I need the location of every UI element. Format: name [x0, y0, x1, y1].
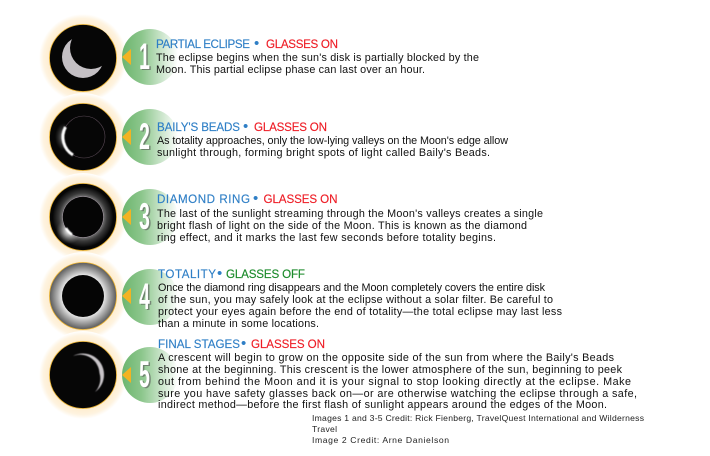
heading: partial eclipse: • [254, 35, 259, 52]
text: diamond ring description: ring effect, and it marks the last few seconds before totality begins. [157, 232, 496, 244]
text: totality description: protect your eyes again before the end of totality—the total eclipse may last less [158, 306, 563, 318]
heading: baily's beads: GLASSES ON [254, 121, 327, 134]
panel: step 3 diamond ring [39, 173, 543, 261]
icon: number badge 2: 2 [139, 116, 150, 158]
icon: totality photo [39, 252, 127, 340]
icon: final crescent photo [39, 331, 127, 419]
heading: final stages: FINAL STAGES [158, 338, 240, 351]
text: diamond ring description [157, 208, 543, 244]
heading: diamond ring: • [253, 190, 258, 207]
text: diamond ring description: The last of the sunlight streaming through the Moon's valleys creates a single [157, 208, 543, 220]
icon: number badge 5: 5 [139, 354, 150, 396]
icon: number badge 4: 4 [141, 277, 152, 319]
icon: number badge 4: 4 [139, 276, 150, 318]
heading: final stages: • [241, 335, 246, 352]
text: totality description [158, 282, 563, 330]
text: partial eclipse description: Moon. This partial eclipse phase can last over an hour. [156, 64, 425, 76]
text: final stages description: indirect method—before the first flash of sunlight appears around the edges of the Moon. [158, 399, 607, 411]
text: baily's beads description: sunlight through, forming bright spots of light called Baily's Beads. [157, 147, 490, 159]
text: image credits: Travel [312, 424, 337, 434]
text: image credits: Images 1 and 3-5 Credit: Rick Fienberg, TravelQuest International and Wilderness [312, 413, 644, 423]
panel: step 1 partial eclipse [39, 14, 479, 102]
text: final stages description: out from behind the Moon and it is your signal to stop looking directly at the eclipse. Make [158, 376, 631, 388]
text: final stages description: A crescent will begin to grow on the opposite side of the sun from where the Baily's Beads [158, 352, 615, 364]
text: totality description: than a minute in some locations. [158, 318, 319, 330]
text: baily's beads description: As totality approaches, only the low-lying valleys on the Moon's edge allow [157, 135, 508, 147]
icon: number badge 2 [122, 109, 178, 165]
icon: number badge 4 [122, 269, 178, 325]
text: final stages description: shone at the beginning. This crescent is the lower atmosphere of the sun, beginning to peek [158, 364, 623, 376]
icon: baily's beads photo [39, 93, 127, 181]
icon: diamond ring photo [39, 173, 127, 261]
text: baily's beads description [157, 135, 508, 159]
heading: final stages: GLASSES ON [251, 338, 325, 351]
heading: partial eclipse: PARTIAL ECLIPSE [156, 38, 250, 51]
icon: number badge 3: 3 [139, 196, 150, 238]
icon: number badge 5 [122, 347, 178, 403]
icon: partial eclipse photo [39, 14, 127, 102]
text: partial eclipse description [156, 52, 479, 76]
heading: diamond ring: DIAMOND RING [157, 193, 250, 206]
icon: number badge 1: 1 [141, 37, 151, 79]
icon: number badge 2: 2 [141, 117, 151, 159]
panel: step 5 final stages [39, 331, 637, 419]
text: totality description: of the sun, you may safely look at the eclipse without a solar filter. Be careful to [158, 294, 553, 306]
heading: baily's beads: • [243, 118, 248, 135]
heading: totality: • [217, 265, 222, 282]
text: final stages description: sure you have safety glasses back on—or are otherwise watching the eclipse through a safe, [158, 388, 637, 400]
text: partial eclipse description: The eclipse begins when the sun's disk is partially blocked by the [156, 52, 479, 64]
heading: totality: GLASSES OFF [226, 268, 305, 281]
icon: number badge 1 [122, 29, 178, 85]
heading: diamond ring: GLASSES ON [264, 193, 338, 206]
text: final stages description [158, 352, 637, 411]
text: image credits [312, 413, 644, 445]
icon: number badge 1: 1 [139, 36, 150, 78]
heading: baily's beads: BAILY'S BEADS [157, 121, 240, 134]
text: diamond ring description: bright flash of light on the side of the Moon. This is known as the diamond [157, 220, 527, 232]
icon: number badge 3: 3 [141, 197, 151, 239]
heading: partial eclipse: GLASSES ON [266, 38, 338, 51]
text: image credits: Image 2 Credit: Arne Danielson [312, 435, 449, 445]
icon: number badge 3 [122, 189, 178, 245]
text: totality description: Once the diamond ring disappears and the Moon completely covers the entire disk [158, 282, 546, 294]
icon: number badge 5: 5 [141, 355, 151, 397]
panel: step 2 baily's beads [39, 93, 508, 181]
panel: step 4 totality [39, 252, 563, 340]
heading: totality: TOTALITY [158, 268, 216, 281]
